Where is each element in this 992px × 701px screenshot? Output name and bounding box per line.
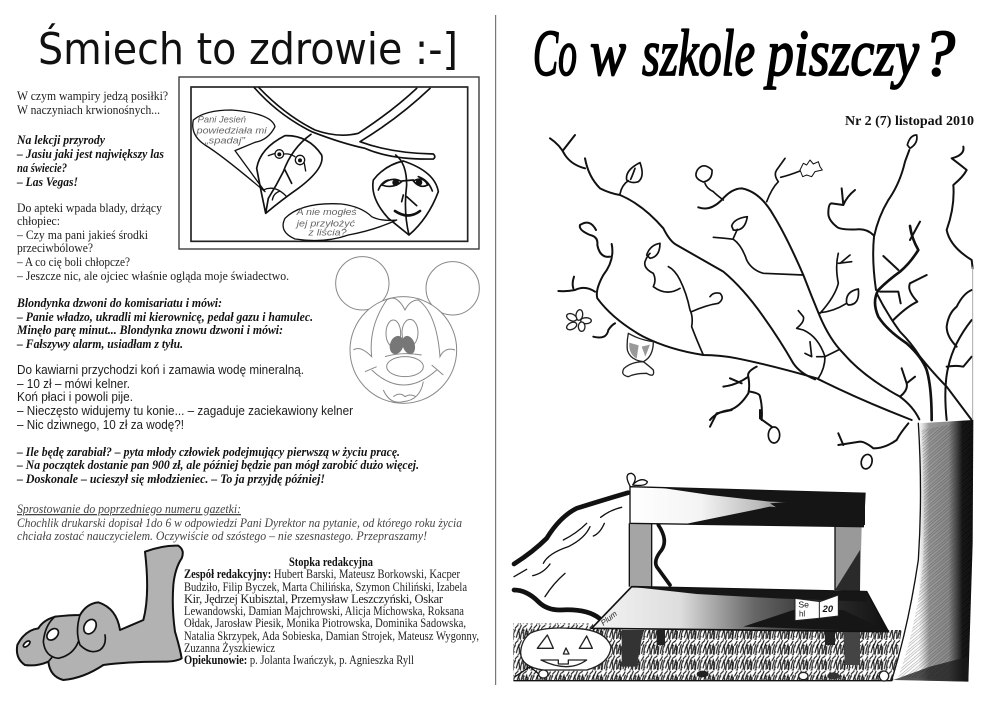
masthead: Co w szkole piszczy?: szkole	[642, 17, 755, 90]
joke: apteka	[16, 200, 289, 283]
foot toe nails	[22, 640, 31, 648]
correction note	[17, 501, 462, 543]
joke: apteka: Do apteki wpada blady, drżący	[17, 200, 162, 215]
joke: praca: – Na początek dostanie pan 900 zł, ale później będzie pan mógł zarobić dużo więcej.	[16, 457, 419, 472]
joke: koń w kawiarni: – Nic dziwnego, 10 zł za wodę?!	[17, 417, 184, 432]
masthead: Co w szkole piszczy?	[533, 17, 955, 90]
signature: Plum	[599, 609, 619, 628]
ribbon behind bench	[656, 525, 670, 585]
ribbon bow	[627, 473, 647, 486]
open book on bench: 20	[822, 604, 834, 614]
illustration: talking leaves: powiedziała mi	[196, 125, 268, 135]
illustration: tree branches	[550, 135, 973, 420]
bench back shading	[660, 488, 865, 527]
editorial footer: Stopka redakcyjna	[289, 555, 374, 569]
illustration: talking leaves	[179, 77, 479, 249]
pumpkin	[521, 628, 611, 670]
joke: praca: – Ile będę zarabiał? – pyta młody człowiek podejmujący pierwszą w życiu pracę.	[16, 444, 400, 459]
title: Śmiech to zdrowie: Śmiech to zdrowie :-]	[38, 22, 458, 75]
joke: apteka: – Czy ma pani jakieś środki	[16, 227, 148, 242]
spiky blossom	[800, 160, 822, 177]
issue number: Nr 2 (7) listopad 2010	[845, 114, 974, 129]
joke: wampiry: W naczyniach krwionośnych...	[17, 102, 160, 117]
open book on bench	[795, 595, 838, 621]
joke: koń w kawiarni: – Nieczęsto widujemy tu konie... – zagaduje zaciekawiony kelner	[17, 403, 354, 418]
left leaf	[257, 134, 322, 213]
masthead: Co w szkole piszczy?: ?	[923, 17, 955, 90]
left speech text: Pani Jesień	[198, 114, 246, 124]
bench seat shading	[637, 587, 888, 632]
joke: las: – Las Vegas!	[16, 174, 78, 189]
leaves	[626, 135, 917, 305]
illustration: tree trunk	[513, 410, 973, 682]
editorial footer: Zespół redakcyjny: Hubert Barski, Mateusz Borkowski, Kacper	[184, 567, 461, 581]
foot toe lines	[43, 615, 105, 662]
editorial footer: Opiekunowie: p. Jolanta Iwańczyk, p. Agnieszka Ryll	[184, 653, 414, 667]
correction note: Chochlik drukarski dopisał 1do 6 w odpowiedzi Pani Dyrektor na pytanie, od którego roku życia	[17, 515, 462, 530]
joke: koń w kawiarni: Do kawiarni przychodzi koń i zamawia wodę mineralną.	[17, 362, 304, 377]
joke: apteka: – A co cię boli chłopcze?	[16, 254, 130, 269]
open book on bench: hl	[799, 610, 805, 619]
editorial footer: Kir, Jędrzej Kubisztal, Przemysław Leszczyński, Oskar	[184, 592, 444, 606]
editorial footer: Ołdak, Jarosław Piesik, Monika Piotrowska, Dominika Sadowska,	[184, 616, 466, 630]
illustration: grey foot	[17, 546, 183, 680]
flower	[565, 309, 591, 331]
joke: apteka: chłopiec:	[17, 213, 60, 228]
joke: koń w kawiarni	[17, 362, 354, 432]
joke: blondynka: – Fałszywy alarm, usiadłam z tyłu.	[16, 336, 183, 351]
joke: koń w kawiarni: – 10 zł – mówi kelner.	[17, 376, 130, 391]
right leaf	[373, 155, 438, 235]
joke: las: Na lekcji przyrody	[16, 132, 105, 147]
trunk base shadow	[893, 657, 968, 682]
joke: blondynka: Minęło parę minut... Blondynka znowu dzwoni i mówi:	[16, 322, 283, 337]
editorial footer: Natalia Skrzypek, Ada Sobieska, Damian Strojek, Mateusz Wygonny,	[184, 629, 479, 643]
illustration: Mickey Mouse	[336, 257, 479, 403]
left speech bubble	[193, 110, 275, 192]
joke: blondynka	[16, 295, 313, 351]
masthead: Co w szkole piszczy?: piszczy	[764, 17, 920, 90]
bench legs	[622, 630, 643, 667]
upper twigs	[620, 158, 803, 275]
editorial footer: Lewandowski, Damian Majchrowski, Alicja Michowska, Roksana	[184, 604, 464, 618]
hanging owl	[623, 333, 654, 377]
right speech bubble	[283, 204, 397, 240]
ground stones	[514, 667, 892, 681]
bench back board	[630, 487, 865, 527]
lower twigs	[710, 410, 908, 448]
illustration: talking leaves: „spadaj”	[204, 135, 246, 145]
joke: wampiry	[17, 88, 168, 117]
centre fold divider	[495, 15, 496, 685]
Mickey face	[353, 298, 455, 357]
Mickey eye shading	[387, 334, 406, 356]
open book on bench: Se	[798, 599, 809, 609]
joke: blondynka: – Panie władzo, ukradli mi kierownicę, pedał gazu i hamulec.	[16, 309, 313, 324]
illustration: talking leaves: z liścia?	[307, 228, 348, 238]
joke: blondynka: Blondynka dzwoni do komisariatu i mówi:	[16, 295, 222, 310]
editorial footer: Budziło, Filip Byczek, Marta Chilińska, Szymon Chiliński, Izabela	[184, 580, 467, 594]
trunk left edge	[892, 423, 920, 680]
main limbs	[550, 135, 815, 379]
ribbons	[514, 493, 628, 564]
editorial footer	[184, 555, 479, 667]
masthead: Co w szkole piszczy?: w	[590, 17, 626, 90]
correction note: Sprostowanie do poprzedniego numeru gazetki:	[17, 501, 241, 516]
joke: las: – Jasiu jaki jest największy las	[16, 146, 164, 161]
left leaf face	[263, 153, 306, 200]
editorial footer: Zuzanna Żyszkiewicz	[184, 641, 275, 655]
joke: praca	[16, 444, 419, 486]
right leaf smile	[395, 211, 420, 215]
joke: las: na świecie?	[17, 160, 67, 175]
bench seat	[592, 587, 888, 632]
joke: praca: – Doskonale – ucieszył się młodzieniec. – To ja przyjdę później!	[16, 471, 325, 486]
joke: apteka: – Jeszcze nic, ale ojciec właśnie ogląda moje świadectwo.	[16, 268, 289, 283]
masthead: Co w szkole piszczy?: Co	[533, 17, 577, 90]
bench back legs	[629, 523, 652, 587]
joke: wampiry: W czym wampiry jedzą posiłki?	[17, 88, 168, 103]
right edge	[971, 267, 974, 420]
joke: koń w kawiarni: Koń płaci i powoli pije.	[17, 389, 133, 404]
branch	[254, 88, 435, 159]
joke: las	[16, 132, 164, 189]
correction note: chciała zostać nauczycielem. Oczywiście od szóstego – nie szesnastego. Przepraszamy!	[17, 528, 427, 543]
right speech text: A nie mogłeś	[296, 207, 357, 217]
illustration: talking leaves: jej przyłożyć	[294, 219, 355, 229]
joke: apteka: przeciwbólowe?	[17, 240, 93, 255]
right leaf face	[378, 177, 432, 191]
grass	[513, 623, 902, 681]
